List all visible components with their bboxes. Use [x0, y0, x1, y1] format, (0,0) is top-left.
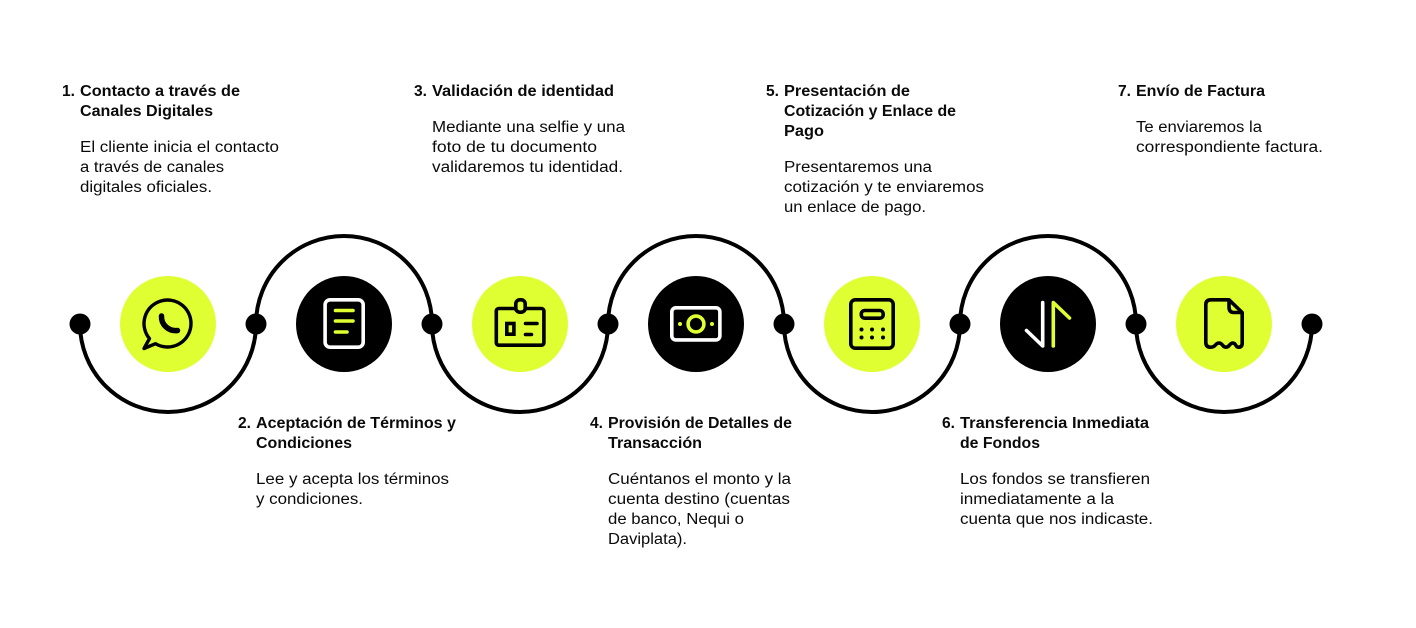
- step 4 description: de banco, Nequi o: [608, 511, 744, 528]
- step 5 heading: Cotización y Enlace de: [784, 103, 956, 120]
- icon: transfer arrows: [1000, 276, 1096, 372]
- connector nodes: [70, 314, 1322, 334]
- step 7 description: [1136, 119, 1323, 156]
- step 1 description: [80, 139, 279, 196]
- step 2: [238, 415, 456, 508]
- step 5 heading: Pago: [784, 123, 824, 140]
- step 7 description: Te enviaremos la: [1136, 119, 1262, 136]
- step 2 description: [256, 471, 449, 508]
- step 4 description: Cuéntanos el monto y la: [608, 471, 791, 488]
- step 2 heading: Aceptación de Términos y: [256, 415, 456, 432]
- step 4 heading: [590, 415, 792, 452]
- icon: id badge: [472, 276, 568, 372]
- step 7 description: correspondiente factura.: [1136, 139, 1323, 156]
- step 5 heading: 5.: [766, 83, 779, 100]
- step 1: [62, 83, 279, 196]
- connector: wavy line: [80, 236, 1312, 412]
- step 2 description: y condiciones.: [256, 491, 363, 508]
- step 6 description: [960, 471, 1153, 528]
- step 1 heading: [62, 83, 240, 120]
- step 4 description: [608, 471, 791, 548]
- step 4: [590, 415, 792, 548]
- step 5 heading: [766, 83, 956, 140]
- icon: invoice: [1176, 276, 1272, 372]
- icon: document: [296, 276, 392, 372]
- step 4 description: cuenta destino (cuentas: [608, 491, 790, 508]
- step 2 description: Lee y acepta los términos: [256, 471, 449, 488]
- step 5: [766, 83, 984, 216]
- step 6 description: cuenta que nos indicaste.: [960, 511, 1153, 528]
- step 4 description: Daviplata).: [608, 531, 687, 548]
- step 6 heading: 6.: [942, 415, 955, 432]
- step 7: [1118, 83, 1323, 156]
- step 7 heading: 7.: [1118, 83, 1131, 100]
- step 5 heading: Presentación de: [784, 83, 910, 100]
- step 3 description: Mediante una selfie y una: [432, 119, 625, 136]
- step 3 heading: 3.: [414, 83, 427, 100]
- step 1 description: digitales oficiales.: [80, 179, 212, 196]
- step 1 description: El cliente inicia el contacto: [80, 139, 279, 156]
- step 1 description: a través de canales: [80, 159, 224, 176]
- step 6 description: inmediatamente a la: [960, 491, 1114, 508]
- step 7 heading: Envío de Factura: [1136, 83, 1265, 100]
- step 2 heading: 2.: [238, 415, 251, 432]
- step 6 description: Los fondos se transfieren: [960, 471, 1150, 488]
- step 6 heading: Transferencia Inmediata: [960, 415, 1149, 432]
- step 2 heading: [238, 415, 456, 452]
- step 3: [414, 83, 625, 176]
- step 1 heading: Contacto a través de: [80, 83, 240, 100]
- icon: calculator: [824, 276, 920, 372]
- step 4 heading: Transacción: [608, 435, 702, 452]
- step 6 heading: [942, 415, 1149, 452]
- step 2 heading: Condiciones: [256, 435, 352, 452]
- step 6: [942, 415, 1153, 528]
- step 3 description: foto de tu documento: [432, 139, 597, 156]
- step 3 heading: Validación de identidad: [432, 83, 614, 100]
- step 6 heading: de Fondos: [960, 435, 1040, 452]
- step 5 description: [784, 159, 984, 216]
- step 1 heading: 1.: [62, 83, 75, 100]
- step 4 heading: 4.: [590, 415, 603, 432]
- icon: banknote: [648, 276, 744, 372]
- step 3 description: [432, 119, 625, 176]
- step 5 description: un enlace de pago.: [784, 199, 926, 216]
- step 1 heading: Canales Digitales: [80, 103, 213, 120]
- step 3 description: validaremos tu identidad.: [432, 159, 623, 176]
- step 5 description: cotización y te enviaremos: [784, 179, 984, 196]
- icon: whatsapp: [120, 276, 216, 372]
- step 5 description: Presentaremos una: [784, 159, 932, 176]
- step 4 heading: Provisión de Detalles de: [608, 415, 792, 432]
